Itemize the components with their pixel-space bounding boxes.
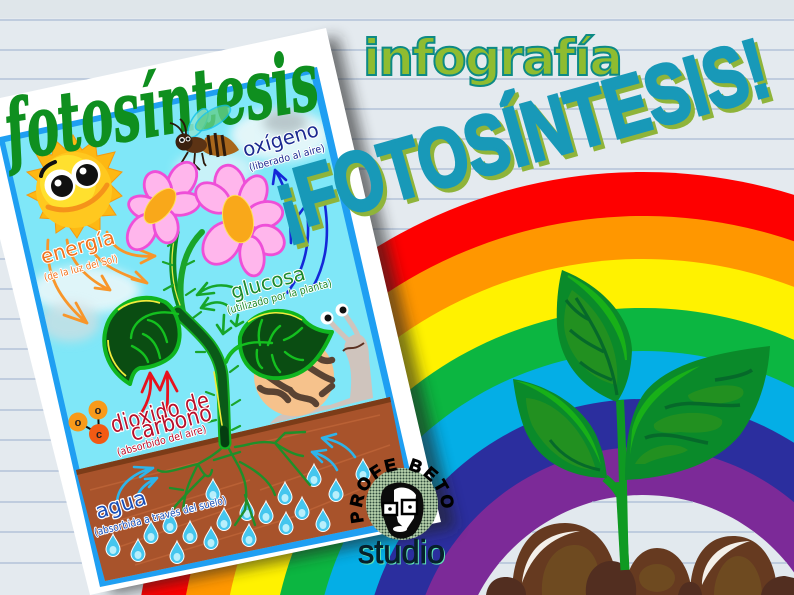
plant stem: [605, 400, 625, 568]
bee: [170, 101, 239, 170]
sun face: [41, 160, 107, 210]
label: dioxido de carbono: dioxido de: [108, 388, 212, 439]
label: agua: (absorbida a través del suelo): [93, 494, 228, 539]
poster inner sky and clouds: [5, 74, 414, 581]
plant stem base: [620, 482, 625, 570]
CO2 molecule: o: [75, 417, 82, 429]
label: dioxido de carbono: (absorbido del aire): [116, 423, 208, 459]
green arrows: [197, 283, 243, 334]
label: dioxido de carbono: carbono: [128, 400, 215, 447]
roots: [158, 432, 310, 525]
label: energía: energía: [38, 225, 117, 269]
poster sheet: [0, 28, 441, 595]
top leaf: [557, 270, 632, 402]
logo ring text: [362, 470, 442, 522]
logo face: [381, 483, 424, 539]
light-blue water arrows: [117, 434, 355, 502]
logo: Profe Beto Studio: PROFE BETO: [350, 458, 454, 524]
logo: Profe Beto Studio: [350, 458, 454, 571]
CO2 molecule: o: [95, 405, 102, 417]
label: oxígeno: (liberado al aire): [248, 143, 326, 174]
right leaf: [226, 311, 332, 378]
arrows: orange energy: [48, 232, 155, 323]
left leaf: [104, 298, 180, 384]
label: energía: (de la luz del Sol): [43, 254, 119, 284]
rainbow: [141, 172, 794, 595]
right plant seedling: [486, 270, 794, 595]
right leaf: [625, 346, 770, 480]
arrows: blue oxygen: [273, 170, 327, 293]
poster title: fotosíntesis: [0, 33, 325, 180]
label: glucosa: glucosa: [228, 261, 308, 304]
label: agua: agua: [92, 486, 149, 524]
poster shadow: [100, 36, 456, 595]
logo wordmark: studio: [359, 534, 446, 571]
red arrows: [140, 372, 177, 415]
flower: large: [190, 162, 290, 277]
label: dioxido de carbono: [108, 388, 215, 459]
label: oxígeno: oxígeno: [240, 117, 321, 162]
label: glucosa: (utilizado por la planta): [226, 277, 333, 317]
CO2 molecule: c: [96, 429, 102, 441]
water drops: [106, 459, 370, 564]
snail: [254, 304, 373, 424]
flower stems and main stem: [163, 232, 272, 443]
flower: small: [121, 157, 203, 255]
heading: infografía: infografía: [363, 29, 623, 87]
soil mounds: [486, 523, 794, 595]
poster blue frame: [0, 67, 422, 587]
poster: fotosíntesis: [0, 28, 441, 595]
soil: [76, 397, 414, 581]
CO2 molecule: [68, 400, 109, 444]
left leaf: [513, 379, 607, 478]
sun: [27, 135, 122, 238]
logo wordmark: studio: [358, 533, 445, 570]
